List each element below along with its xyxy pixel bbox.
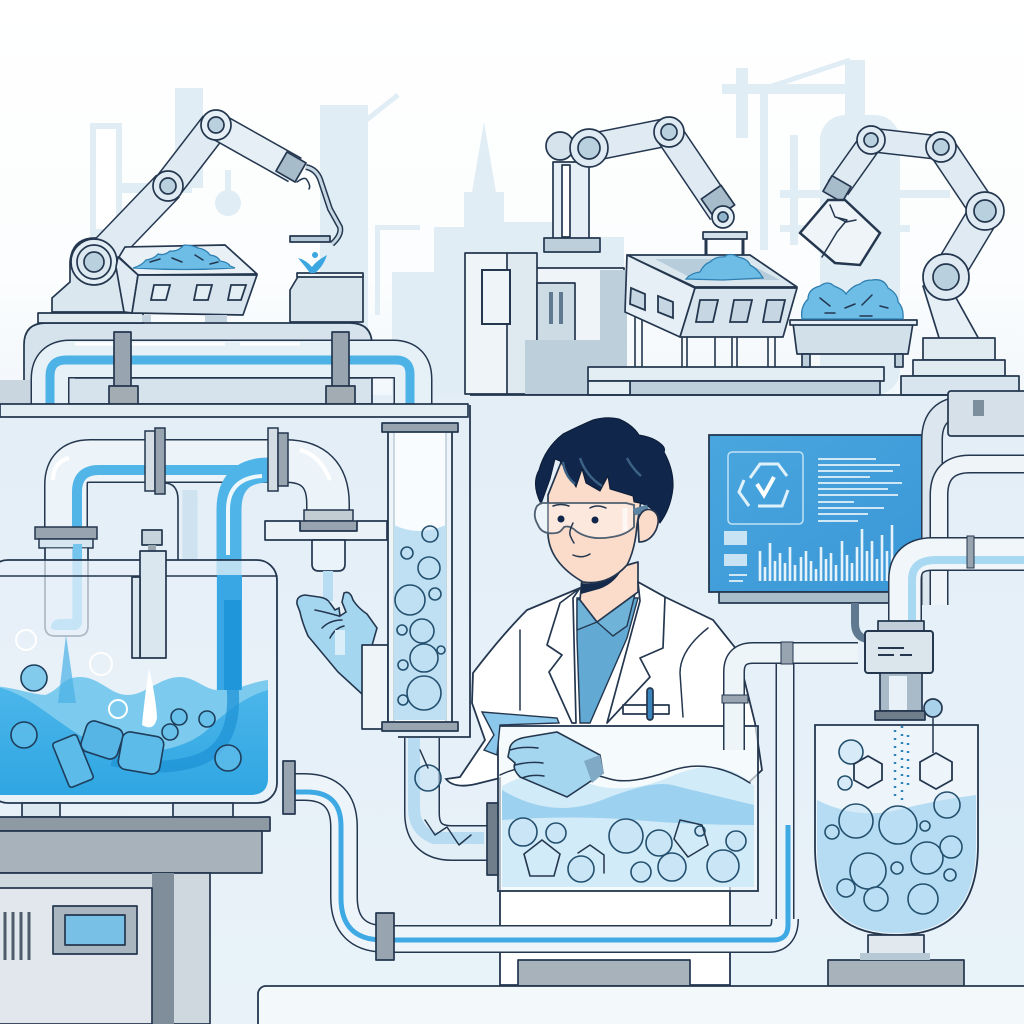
machine block centre [465, 253, 627, 395]
lower pipe [290, 660, 788, 940]
ear [638, 509, 658, 542]
base blocks [518, 960, 964, 986]
hair [535, 418, 673, 523]
bar chart [760, 525, 902, 581]
glass column [382, 423, 458, 731]
probe [132, 530, 166, 658]
monitor [709, 435, 922, 603]
water [0, 677, 268, 795]
falling particles [895, 726, 908, 806]
hexagon molecules [854, 756, 882, 788]
recycle icon [739, 464, 788, 506]
shirt and collar [577, 598, 638, 723]
robot arm centre [544, 117, 747, 269]
scientist head [535, 418, 673, 583]
left tank [0, 530, 277, 817]
left platform with pipes [0, 313, 413, 405]
plastic pieces [52, 734, 94, 788]
conveyor platform right [588, 280, 917, 395]
pipe clamps [35, 428, 357, 548]
hopper left with flakes [116, 245, 257, 322]
hopper centre with flakes [625, 254, 797, 368]
factory skyline silhouette [90, 60, 950, 395]
display [53, 906, 137, 954]
raised gloved hand [297, 592, 388, 729]
valve box top right [948, 391, 1024, 436]
bubbles [825, 740, 962, 914]
left glass pipes [53, 450, 330, 700]
pipe clamps right [722, 536, 974, 703]
text lines [818, 459, 902, 521]
lapels [547, 588, 580, 723]
small container with splash [290, 252, 363, 322]
valve assembly [865, 621, 942, 720]
machine table [0, 817, 270, 1024]
right side pipes [734, 407, 1024, 750]
central dividing frame [0, 395, 1024, 737]
robot arm left [52, 110, 340, 312]
glass pipe [50, 344, 413, 404]
gloved hand with tablet [482, 712, 604, 797]
vent [5, 912, 29, 960]
lower U pipe [414, 738, 499, 875]
pocket and pen [623, 705, 669, 714]
scientist coat [446, 562, 762, 985]
bubbles [11, 665, 241, 771]
neck [580, 562, 638, 622]
robot arm right [800, 126, 1019, 395]
central tank [498, 726, 758, 891]
bottom platform [258, 986, 1024, 1024]
goggles [535, 503, 634, 538]
flakes pile [802, 280, 903, 319]
horizontal shelf and test tube [45, 521, 387, 636]
right flask [815, 718, 978, 960]
